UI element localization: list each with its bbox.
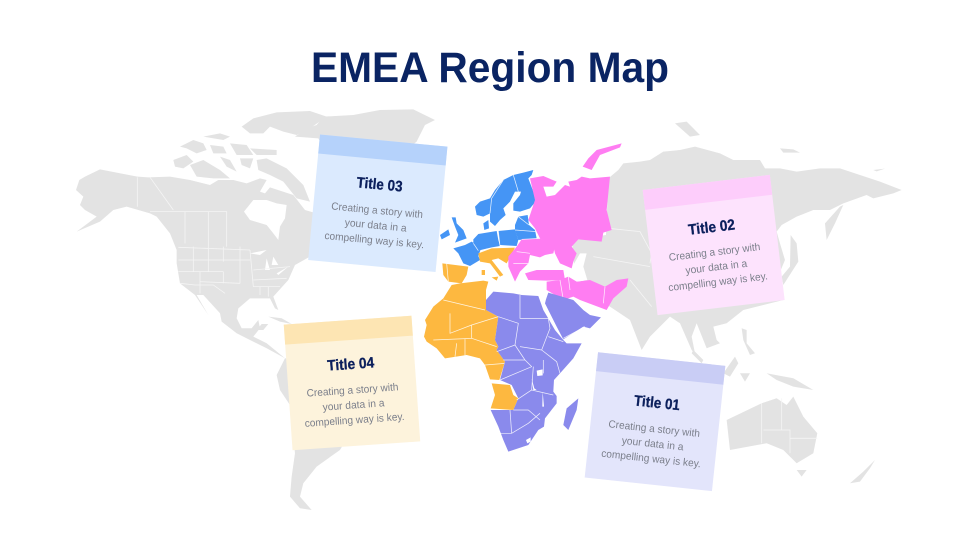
heading 02: Title 02 [687, 216, 736, 239]
Caspian Sea [573, 253, 587, 282]
body text 03: Creating a story with [331, 200, 424, 221]
body text 03: compelling way is key. [324, 230, 425, 251]
card: Title 04 [284, 316, 420, 450]
body text 01: compelling way is key. [601, 448, 701, 470]
body text 02: Creating a story with [668, 241, 761, 264]
body text 03 [324, 200, 427, 251]
body text 01: Creating a story with [608, 418, 701, 440]
map: Africa and Arabia [424, 281, 601, 452]
heading 01: Title 01 [633, 392, 681, 414]
card header 02 [643, 175, 772, 210]
lakes in Africa [526, 369, 544, 443]
map: Canada and US border lines [137, 177, 290, 297]
world map [76, 109, 902, 510]
body text 04 [302, 381, 405, 430]
map: Americas in grey [76, 109, 435, 510]
map: Russia, Eastern Europe and Middle East [508, 143, 628, 310]
body text 02: your data in a [685, 258, 748, 277]
map: Europe [440, 170, 537, 283]
title: EMEA Region Map [311, 44, 669, 92]
region: Southern Europe in amber [442, 248, 515, 283]
heading 03: Title 03 [356, 174, 403, 196]
body text 04: compelling way is key. [304, 411, 405, 430]
map: Asia and Australia border lines [593, 228, 817, 453]
body text 04: Creating a story with [306, 381, 399, 400]
body text 04: your data in a [322, 397, 385, 414]
region: pink countries [508, 143, 628, 310]
card: Title 03 [308, 135, 447, 272]
region: Northern and Western Europe in blue [440, 170, 537, 266]
Hudson Bay and Great Lakes [244, 200, 287, 240]
heading 04: Title 04 [327, 354, 375, 375]
card header 03 [318, 135, 447, 166]
Arctic islands [173, 111, 327, 202]
card: Title 02 [643, 175, 785, 315]
body text 02: compelling way is key. [668, 270, 768, 294]
map: Asia and Oceania in grey [572, 122, 902, 483]
body text 01: your data in a [621, 435, 684, 453]
card header 04 [284, 316, 413, 345]
body text 01 [601, 418, 705, 470]
body text 02 [664, 241, 768, 294]
card: Title 01 [585, 352, 725, 491]
body text 03: your data in a [344, 217, 407, 235]
region: East and Southern Africa and Arabia in violet [486, 292, 601, 452]
region: West Africa and Angola in amber [424, 281, 518, 410]
card header 01 [596, 352, 725, 385]
